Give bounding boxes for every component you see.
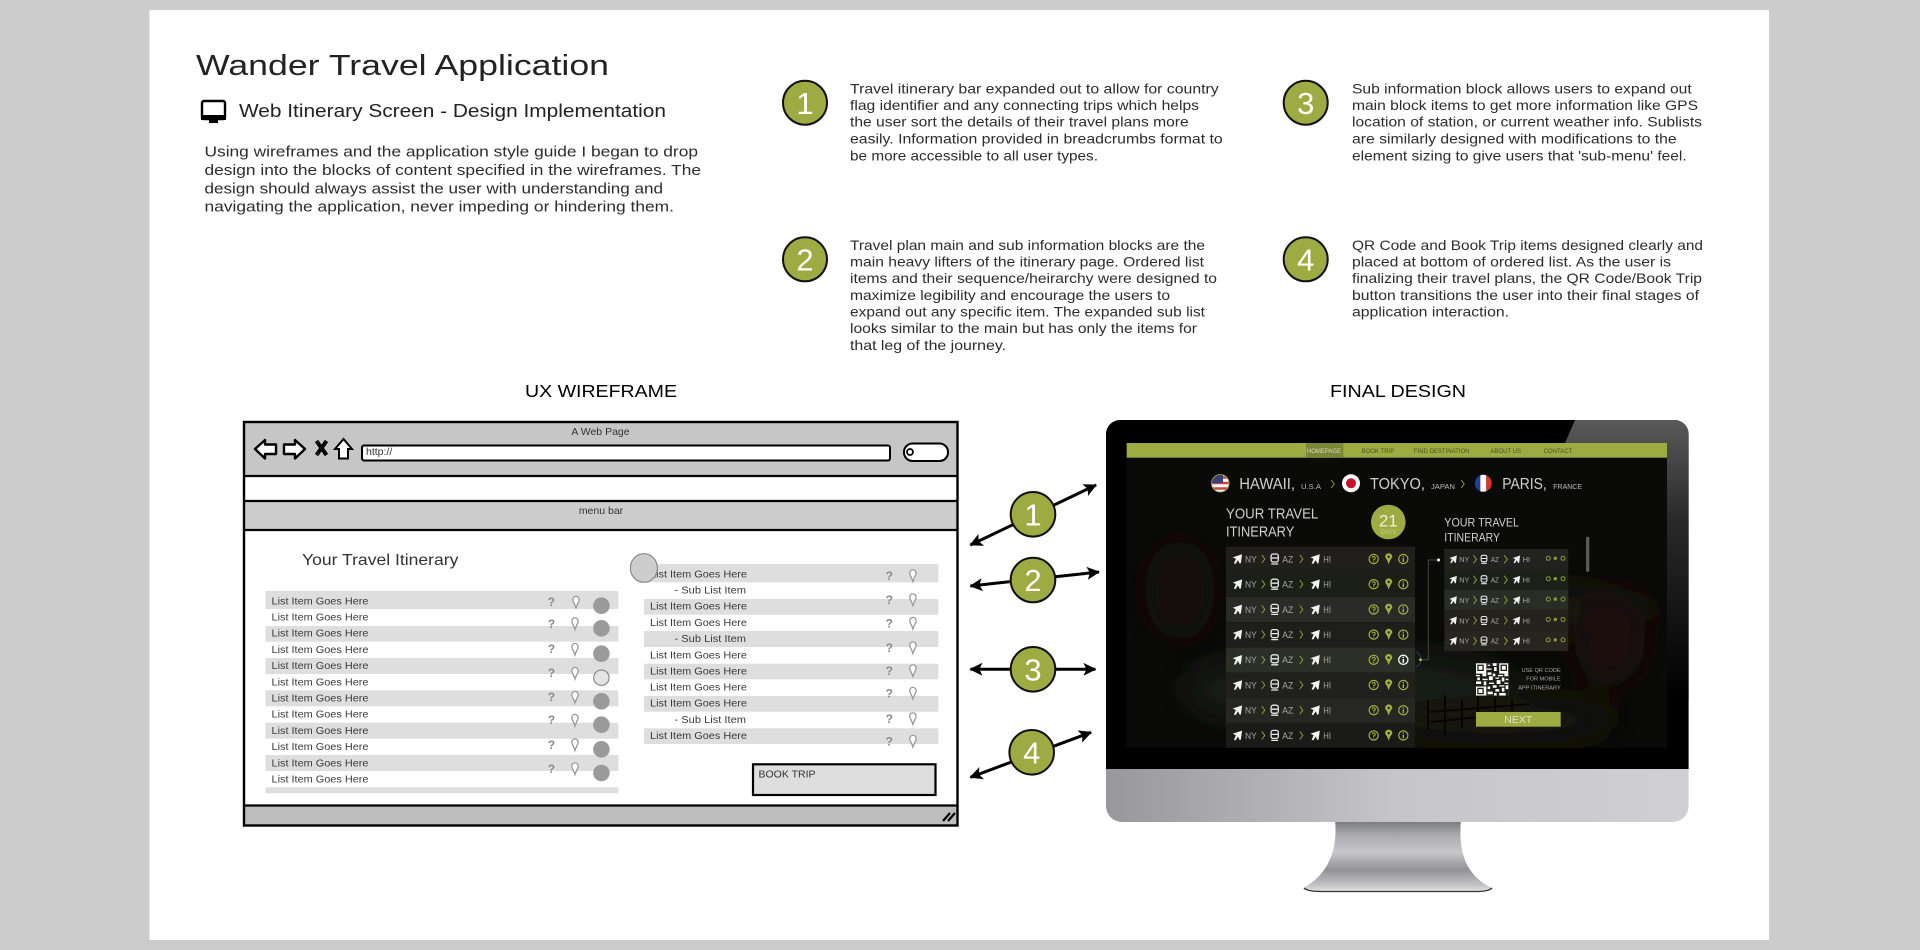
sub information block: HI xyxy=(1523,555,1530,564)
sub information block: AZ xyxy=(1491,576,1499,585)
left list: List Item Goes Here xyxy=(272,709,369,721)
callout 4: 4 xyxy=(1297,242,1314,278)
right list: List Item Goes Here xyxy=(650,617,747,629)
callout 2: items and their sequence/heirarchy were designed to xyxy=(850,270,1217,286)
main information block: AZ xyxy=(1282,580,1293,591)
callout 4: finalizing their travel plans, the QR Code/Book Trip xyxy=(1352,270,1702,286)
main information block: AZ xyxy=(1282,680,1293,691)
right list: List Item Goes Here xyxy=(650,730,747,742)
main information block: AZ xyxy=(1282,630,1293,641)
arrow and marker 1 xyxy=(970,485,1096,545)
main information block: HI xyxy=(1323,554,1331,565)
app screen xyxy=(1127,443,1667,748)
main information block: NY xyxy=(1245,605,1257,616)
callout 2: that leg of the journey. xyxy=(850,337,1006,353)
QR caption xyxy=(1518,668,1561,692)
right list: List Item Goes Here xyxy=(650,698,747,710)
main information block: AZ xyxy=(1282,731,1293,742)
main itinerary heading xyxy=(1226,508,1318,536)
QR caption: APP ITINERARY xyxy=(1518,686,1561,692)
book trip button xyxy=(753,764,936,795)
main information block: HI xyxy=(1323,605,1331,616)
panel: final design monitor xyxy=(1106,420,1689,892)
screen glare xyxy=(1565,420,1689,700)
left list: List Item Goes Here xyxy=(272,741,369,753)
callout 1: flag identifier and any connecting trips which helps xyxy=(850,97,1199,113)
callout 3: Sub information block allows users to expand out xyxy=(1352,80,1692,96)
right list: - Sub List Item xyxy=(674,633,746,645)
arrow and marker 3: 3 xyxy=(1024,652,1042,688)
monitor stand xyxy=(1304,820,1493,892)
heading: final design: FINAL DESIGN xyxy=(1330,381,1466,401)
intro text block: navigating the application, never impeding or hindering them. xyxy=(204,200,674,216)
nav bar: FIND DESTINATION xyxy=(1414,449,1469,455)
icon: monitor xyxy=(201,101,226,123)
right list: List Item Goes Here xyxy=(650,649,747,661)
panel: UX wireframe xyxy=(244,422,958,826)
left list: List Item Goes Here xyxy=(272,612,369,624)
sub information block: AZ xyxy=(1491,596,1499,605)
callout 1: easily. Information provided in breadcrumbs format to xyxy=(850,130,1223,146)
left list: List Item Goes Here xyxy=(272,660,369,672)
landscape photo xyxy=(1127,443,1667,748)
main itinerary heading: YOUR TRAVEL xyxy=(1226,505,1318,522)
QR code xyxy=(1476,663,1508,696)
sub information block: NY xyxy=(1459,596,1469,605)
callout 2 xyxy=(783,237,1217,353)
nav bar xyxy=(1127,443,1667,458)
book trip button: BOOK TRIP xyxy=(758,769,816,781)
sub information block: NY xyxy=(1459,616,1469,625)
right list: ? xyxy=(886,569,893,583)
arrow and marker 4 xyxy=(970,730,1091,777)
QR caption: FOR MOBILE xyxy=(1526,677,1561,683)
sub itinerary heading: YOUR TRAVEL xyxy=(1444,516,1519,530)
main information block: HI xyxy=(1323,630,1331,641)
arrow and marker 1: 1 xyxy=(1024,498,1042,532)
days badge xyxy=(1371,505,1406,539)
main information block: NY xyxy=(1245,706,1257,717)
right list: - Sub List Item xyxy=(674,714,746,726)
main information block xyxy=(1226,547,1415,748)
main information block: HI xyxy=(1323,680,1331,691)
breadcrumb: trip stops: FRANCE xyxy=(1553,482,1582,491)
bottom status bar xyxy=(244,806,958,826)
right list: List Item Goes Here xyxy=(650,568,747,580)
sub information block: NY xyxy=(1459,555,1469,564)
intro text block: design should always assist the user with understanding and xyxy=(204,181,663,197)
callout 2: Travel plan main and sub information blocks are the xyxy=(850,237,1205,253)
wireframe heading: Your Travel Itinerary xyxy=(302,552,458,569)
sub information block: HI xyxy=(1523,637,1530,646)
right list: ? xyxy=(886,664,893,678)
breadcrumb: trip stops: JAPAN xyxy=(1431,482,1455,491)
callout 3: are similarly designed with modifications to the xyxy=(1352,130,1677,146)
left list: ? xyxy=(548,642,555,656)
callout 3: 3 xyxy=(1297,86,1314,121)
left list: List Item Goes Here xyxy=(272,628,369,640)
main information block: NY xyxy=(1245,630,1257,641)
callout 4: placed at bottom of ordered list. As the user is xyxy=(1352,254,1671,270)
callout 1 xyxy=(783,80,1223,164)
right list: List Item Goes Here xyxy=(650,665,747,677)
next button xyxy=(1476,712,1561,727)
right list: ? xyxy=(886,641,893,655)
left list: ? xyxy=(548,617,555,631)
left list: List Item Goes Here xyxy=(272,725,369,737)
intro text block xyxy=(204,145,701,216)
callout 4: QR Code and Book Trip items designed clearly and xyxy=(1352,237,1703,253)
main information block: HI xyxy=(1323,655,1331,666)
main information block: HI xyxy=(1323,706,1331,717)
monitor body xyxy=(1106,769,1689,822)
heading: UX wireframe: UX WIREFRAME xyxy=(525,381,677,401)
breadcrumb: trip stops: PARIS, xyxy=(1502,476,1547,493)
main information block: AZ xyxy=(1282,605,1293,616)
right list: ? xyxy=(886,686,893,700)
callout 1: Travel itinerary bar expanded out to allow for country xyxy=(850,80,1219,96)
days badge: DAYS xyxy=(1380,530,1396,536)
left list: ? xyxy=(548,762,555,776)
sub information block xyxy=(1444,549,1568,651)
callout 3 xyxy=(1284,80,1702,164)
sub information block: AZ xyxy=(1491,555,1499,564)
nav bar: BOOK TRIP xyxy=(1362,449,1394,455)
browser title bar: A Web Page xyxy=(571,426,630,438)
arrow and marker 4: 4 xyxy=(1023,736,1040,770)
left list: ? xyxy=(548,666,555,680)
scrollbar xyxy=(1586,537,1589,572)
QR caption: USE QR CODE xyxy=(1522,668,1561,674)
callout 2: 2 xyxy=(796,242,814,278)
left list: List Item Goes Here xyxy=(272,692,369,704)
sub information block: NY xyxy=(1459,637,1469,646)
main information block: NY xyxy=(1245,554,1257,565)
callout 2: looks similar to the main but has only the items for xyxy=(850,320,1197,336)
main information block: NY xyxy=(1245,731,1257,742)
right list: - Sub List Item xyxy=(674,585,746,597)
sub itinerary heading xyxy=(1444,518,1519,542)
nav bar: CONTACT xyxy=(1544,449,1573,455)
left list: ? xyxy=(548,738,555,752)
right list: ? xyxy=(886,712,893,726)
main information block: HI xyxy=(1323,580,1331,591)
days badge: 21 xyxy=(1379,512,1398,530)
next button: NEXT xyxy=(1504,714,1533,726)
nav bar: HOMEPAGE xyxy=(1307,449,1341,455)
callout 2: maximize legibility and encourage the users to xyxy=(850,287,1170,303)
sub information block: NY xyxy=(1459,576,1469,585)
sub information block: HI xyxy=(1523,576,1530,585)
breadcrumb: trip stops: TOKYO, xyxy=(1370,476,1425,493)
main information block: AZ xyxy=(1282,655,1293,666)
callout 3: main block items to get more information like GPS xyxy=(1352,97,1698,113)
left list: List Item Goes Here xyxy=(272,676,369,688)
sub information block: AZ xyxy=(1491,637,1499,646)
left list: ? xyxy=(548,595,555,609)
left list: List Item Goes Here xyxy=(272,595,369,607)
title: Wander Travel Application xyxy=(196,50,609,82)
right list xyxy=(630,554,938,748)
callout 1: 1 xyxy=(796,86,814,121)
sub information block: AZ xyxy=(1491,616,1499,625)
subtitle: Web Itinerary Screen - Design Implementation xyxy=(239,100,666,121)
main information block: NY xyxy=(1245,580,1257,591)
left list: ? xyxy=(548,690,555,704)
left list: List Item Goes Here xyxy=(272,757,369,769)
main information block: NY xyxy=(1245,655,1257,666)
right list: List Item Goes Here xyxy=(650,682,747,694)
intro text block: design into the blocks of content specified in the wireframes. The xyxy=(204,163,701,179)
callout 2: expand out any specific item. The expanded sub list xyxy=(850,304,1205,320)
main information block: AZ xyxy=(1282,706,1293,717)
breadcrumb: trip stops: U.S.A xyxy=(1301,482,1321,491)
intro text block: Using wireframes and the application style guide I began to drop xyxy=(204,145,698,161)
arrow and marker 2: 2 xyxy=(1024,563,1042,598)
right list: List Item Goes Here xyxy=(650,601,747,613)
right list: ? xyxy=(886,593,893,607)
right list: ? xyxy=(886,616,893,630)
left list: ? xyxy=(548,713,555,727)
breadcrumb: trip stops: HAWAII, xyxy=(1239,476,1295,493)
callout 1: the user sort the details of their travel plans more xyxy=(850,114,1189,130)
main information block: AZ xyxy=(1282,554,1293,565)
callout 3: element sizing to give users that 'sub-menu' feel. xyxy=(1352,148,1687,164)
arrow and marker 2 xyxy=(970,558,1099,602)
nav bar: ABOUT US xyxy=(1490,449,1521,455)
breadcrumb: trip stops xyxy=(1211,474,1582,493)
callout 3: location of station, or current weather info. Sublists xyxy=(1352,114,1702,130)
left list xyxy=(265,591,618,793)
right list: ? xyxy=(886,734,893,748)
main itinerary heading: ITINERARY xyxy=(1226,523,1294,540)
main information block: NY xyxy=(1245,680,1257,691)
connector line xyxy=(1416,558,1440,667)
main information block: HI xyxy=(1323,731,1331,742)
arrow and marker 3 xyxy=(970,647,1095,692)
left list: List Item Goes Here xyxy=(272,774,369,786)
sub itinerary heading: ITINERARY xyxy=(1444,530,1500,544)
left list: List Item Goes Here xyxy=(272,644,369,656)
callout 4 xyxy=(1284,237,1703,320)
callout 1: be more accessible to all user types. xyxy=(850,148,1098,164)
callout 2: main heavy lifters of the itinerary page. Ordered list xyxy=(850,254,1204,270)
callout 4: button transitions the user into their final stages of xyxy=(1352,287,1699,303)
browser title bar: http:// xyxy=(366,446,392,458)
callout 4: application interaction. xyxy=(1352,304,1509,320)
browser title bar xyxy=(244,422,958,476)
sub information block: HI xyxy=(1523,596,1530,605)
sub information block: HI xyxy=(1523,616,1530,625)
menu bar: menu bar xyxy=(579,505,624,517)
menu bar xyxy=(244,501,958,530)
